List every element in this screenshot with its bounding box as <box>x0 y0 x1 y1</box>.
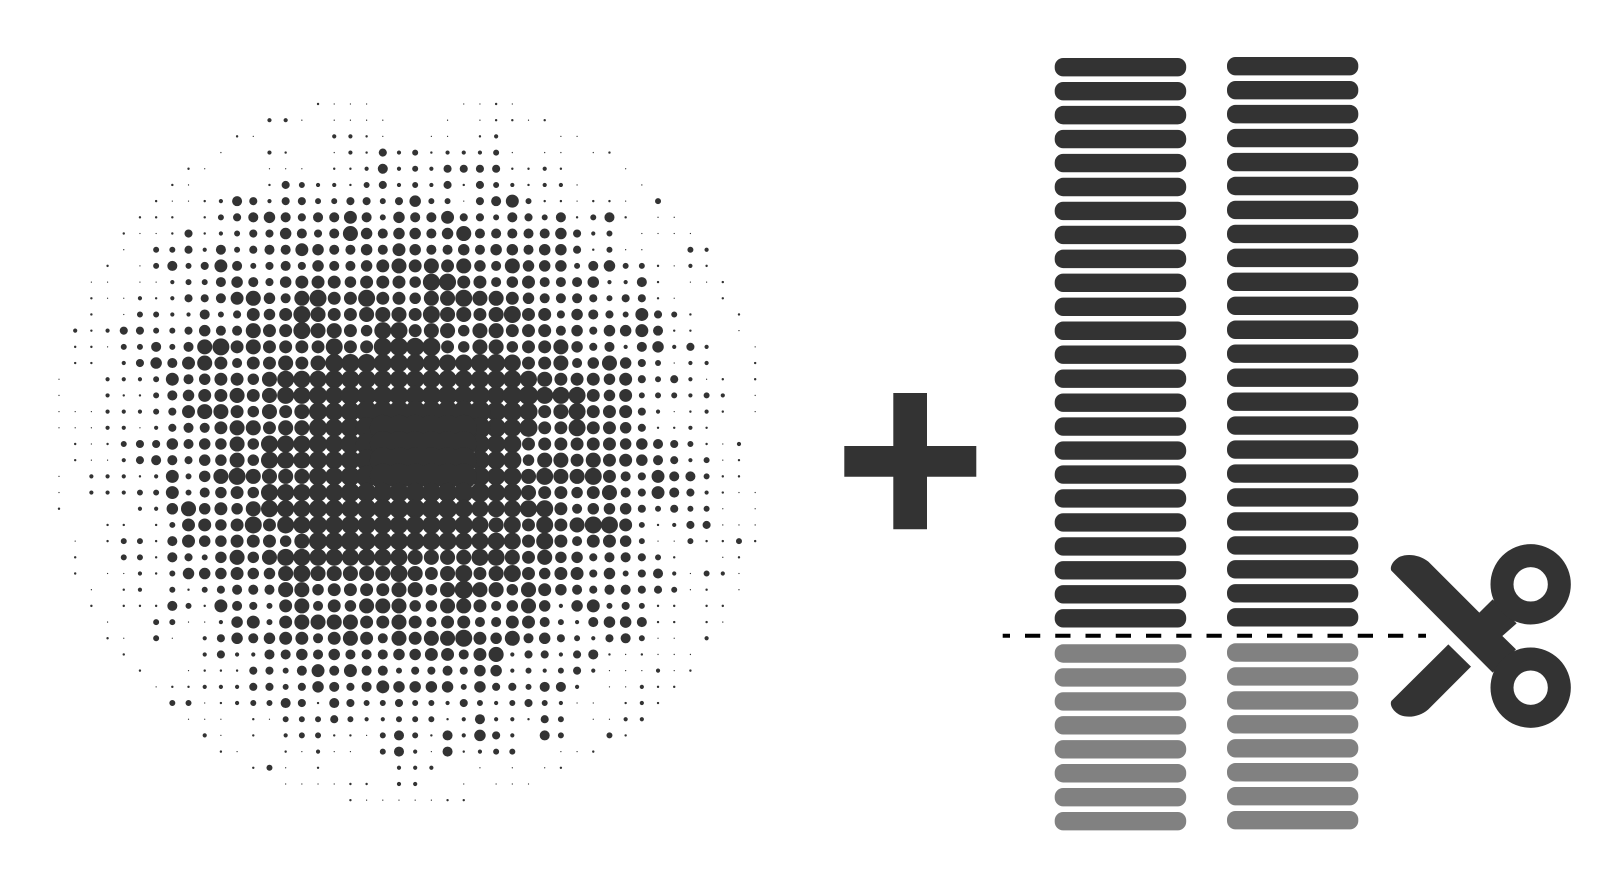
dashed cut line <box>1003 634 1426 638</box>
right column kept dark stripes <box>1227 57 1358 626</box>
left column cut grey stripes <box>1055 644 1186 830</box>
left column kept dark stripes <box>1055 58 1186 627</box>
icon: scissors <box>1391 555 1559 717</box>
right column cut grey stripes <box>1227 643 1358 829</box>
plus sign <box>844 393 976 529</box>
right stripe column <box>1227 57 1358 829</box>
halftone dot circle <box>59 104 755 800</box>
left stripe column <box>1055 58 1186 830</box>
